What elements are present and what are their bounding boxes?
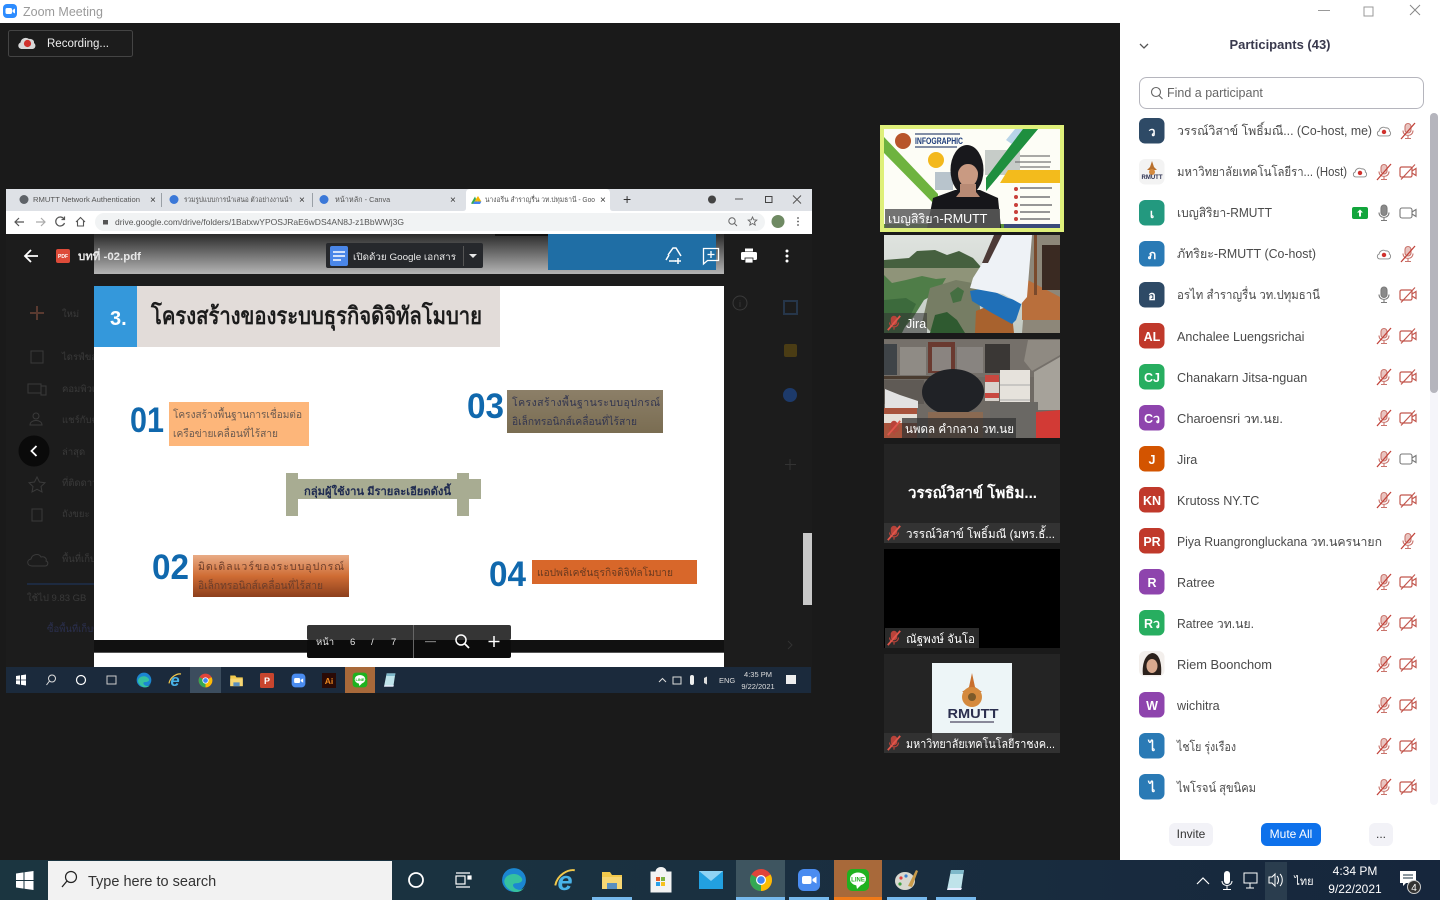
cortana (409, 873, 423, 887)
item 01: โครงสร้างพื้นฐานการเชื่อมต่อ (173, 407, 302, 421)
participant row: Rว (1144, 617, 1160, 631)
participant row: R (1147, 576, 1157, 590)
participant row: J (1149, 453, 1156, 467)
participant row: Jira (1177, 453, 1197, 467)
dimmed drive sidebar: คอมพิวเตอร์ (62, 383, 112, 395)
participant row: วรรณ์วิสาข์ โพธิ์มณี... (Co-host, me) (1177, 121, 1372, 138)
browser tab strip: + (623, 191, 631, 207)
item 02: 02 (152, 548, 189, 587)
mute all button (1261, 823, 1321, 846)
participant row: อรไท สำราญรื่น วท.ปทุมธานี (1177, 286, 1320, 303)
pdf viewer toolbar: บทที่ -02.pdf (78, 248, 141, 263)
task view (456, 873, 471, 887)
participant row: Anchalee Luengsrichai (1177, 330, 1304, 344)
dimmed drive sidebar: พื้นที่เก็บข้อมูล (62, 552, 121, 565)
participant row: Krutoss NY.TC (1177, 494, 1259, 508)
participant row: W (1146, 699, 1158, 713)
list scrollbar (1430, 113, 1438, 805)
recording indicator: Recording... (47, 38, 109, 50)
centre banner (286, 473, 481, 516)
window title bar: Zoom Meeting (23, 5, 103, 19)
item 03: โครงสร้างพื้นฐานระบบอุปกรณ์ (512, 395, 660, 409)
participant row: KN (1143, 494, 1161, 508)
video thumbnail: RMUTT logo: มหาวิทยาลัยเทคโนโลยีราชงค... (906, 737, 1055, 751)
dimmed drive sidebar: แชร์กับฉัน (62, 414, 105, 426)
browser tab strip: นางอรีน สำราญรื่น วท.ปทุมธานี - Goo (485, 194, 595, 204)
participant row: อ (1148, 289, 1156, 303)
item 03: อิเล็กทรอนิกส์เคลื่อนที่ไร้สาย (512, 414, 637, 428)
system tray: 4 (1411, 883, 1417, 894)
item 03 (467, 387, 663, 433)
pdf viewer toolbar: เปิดด้วย Google เอกสาร (353, 252, 456, 263)
browser tab strip: × (450, 195, 456, 206)
item 02: มิดเดิลแวร์ของระบบอุปกรณ์ (198, 560, 344, 573)
participant row: Piya Ruangrongluckana วท.นครนายก (1177, 535, 1382, 549)
participant row (1139, 282, 1416, 308)
dimmed drive sidebar: ใช้ไป 9.83 GB (27, 592, 86, 604)
room name label (888, 418, 1016, 438)
browser tab strip: รวมรูปแบบการนำเสนอ ตัวอย่างงานนำ (184, 195, 292, 204)
participant row (1139, 159, 1416, 184)
item 01 (130, 401, 309, 446)
item 02 (152, 548, 349, 597)
participant row (1139, 200, 1416, 226)
participant row (1139, 323, 1416, 348)
participant row: Ratree วท.นย. (1177, 617, 1254, 631)
dimmed right rail icons: i (739, 299, 741, 309)
participant row: ไพโรจน์ สุขนิคม (1176, 780, 1256, 796)
slide heading: 3. (110, 308, 127, 330)
pdf viewer toolbar: PDF (58, 254, 68, 260)
participant row (1139, 733, 1416, 758)
participant row: Ratree (1177, 576, 1215, 590)
dimmed drive sidebar: ซื้อพื้นที่เก็บข้อมูล (47, 622, 118, 635)
item 03: 03 (467, 387, 504, 426)
dimmed drive sidebar: ล่าสุด (62, 447, 85, 458)
presenter name label (885, 209, 1000, 228)
window controls (1318, 5, 1420, 16)
video thumbnail: presenter (880, 125, 1064, 232)
presenter name label: เบญสิริยา-RMUTT (888, 212, 988, 226)
shared screen taskbar: 4:35 PM (744, 670, 772, 679)
participant row: wichitra (1176, 699, 1220, 713)
window title bar (0, 0, 1120, 23)
video thumbnail: room with portraits (884, 339, 1060, 438)
browser address bar: drive.google.com/drive/folders/1BatxwYPOSJRaE6wDS4AN8J-z1BbWWj3G (115, 217, 404, 227)
participant row (1139, 692, 1416, 718)
recording indicator (8, 30, 132, 56)
centre banner: กลุ่มผู้ใช้งาน มีรายละเอียดดังนี้ (304, 483, 452, 499)
item 01: เครือข่ายเคลื่อนที่ไร้สาย (173, 426, 278, 440)
participant row (1139, 405, 1416, 430)
dimmed right rail icons (733, 296, 797, 649)
taskbar search box (48, 861, 392, 900)
browser tab strip (6, 189, 812, 211)
panel header: Participants (43) (1230, 38, 1330, 52)
participant row: Charoensri วท.นย. (1177, 412, 1283, 426)
system tray: 9/22/2021 (1328, 882, 1382, 896)
dimmed drive sidebar: ที่ติดดาว (62, 476, 97, 489)
scrollbar (803, 533, 812, 605)
video thumbnail: name only (884, 444, 1060, 543)
video thumbnail: black (884, 549, 1060, 648)
participant row: Chanakarn Jitsa-nguan (1177, 371, 1307, 385)
start button (16, 871, 34, 890)
taskbar search box: Type here to search (88, 874, 216, 890)
pdf page control: 6 (350, 637, 355, 648)
system tray: 4:34 PM (1333, 864, 1377, 878)
browser tab strip: หน้าหลัก - Canva (335, 195, 391, 204)
mute all button: Mute All (1270, 827, 1312, 841)
shared screen taskbar: 9/22/2021 (741, 682, 775, 691)
browser tab strip: RMUTT Network Authentication (33, 195, 140, 204)
slide heading (94, 286, 500, 347)
browser tab strip: × (150, 195, 156, 206)
Jira name label (884, 313, 927, 333)
pinned apps (502, 860, 976, 900)
participant row: มหาวิทยาลัยเทคโนโลยีรา... (Host) (1177, 164, 1347, 179)
shared screen taskbar: ENG (719, 676, 735, 685)
item 04: แอปพลิเคชันธุรกิจดิจิทัลโมบาย (537, 566, 673, 579)
item 04 (489, 555, 697, 594)
video thumbnail: name only: วรรณ์วิสาข์ โพธิ์มณี (มทร.ธั้... (906, 525, 1055, 541)
dimmed drive sidebar: ไดรฟ์ของฉัน (61, 351, 115, 363)
item 02: อิเล็กทรอนิกส์เคลื่อนที่ไร้สาย (198, 578, 323, 592)
shared screen taskbar (6, 667, 811, 693)
dimmed drive sidebar: ใหม่ (62, 308, 79, 320)
next page edge (94, 640, 724, 667)
participant row: CJ (1144, 371, 1160, 385)
shared screen: browser window (6, 189, 812, 693)
shared screen taskbar: Ai (325, 676, 333, 686)
participant row: ไ (1147, 739, 1155, 754)
browser address bar (6, 211, 812, 234)
video thumbnail: presenter: INFOGRAPHIC (915, 136, 963, 146)
more button (1369, 823, 1393, 846)
invite button (1169, 823, 1213, 846)
participant row: ภัทริยะ-RMUTT (Co-host) (1177, 247, 1316, 261)
dimmed drive sidebar: ถังขยะ (62, 509, 90, 520)
room name label: นพดล คำกลาง วท.นย (905, 422, 1014, 436)
windows taskbar (0, 860, 1440, 900)
system tray (1197, 862, 1420, 900)
participant row: Cว (1144, 412, 1160, 426)
participant row: เบญสิริยา-RMUTT (1177, 206, 1272, 220)
pdf page control (307, 625, 511, 658)
participant row (1139, 610, 1416, 636)
more button: ... (1376, 827, 1386, 841)
video thumbnail: name only: วรรณ์วิสาข์ โพธิม... (908, 483, 1037, 502)
pdf page control: หน้า (316, 637, 334, 648)
participant row: เ (1150, 207, 1154, 221)
participant row: ภ (1148, 248, 1156, 262)
sidebar collapse button (18, 436, 50, 466)
video thumbnail: RMUTT logo (884, 654, 1060, 753)
participant row (1139, 241, 1415, 266)
participant row: ไชโย รุ่งเรือง (1176, 739, 1236, 755)
item 01: 01 (130, 401, 164, 440)
participant row: ไ (1147, 780, 1155, 795)
participant row (1139, 569, 1416, 594)
slide page (94, 286, 724, 640)
video thumbnail: RMUTT logo: RMUTT (948, 706, 999, 721)
pdf page control: / (371, 637, 374, 648)
item 04: 04 (489, 555, 527, 594)
participant row (1139, 528, 1415, 554)
video thumbnail: Jira (884, 235, 1060, 333)
participant row (1139, 364, 1416, 390)
panel header (1140, 38, 1330, 52)
participant row (1139, 118, 1415, 144)
participant row: Riem Boonchom (1177, 658, 1272, 672)
participants panel (1120, 0, 1440, 860)
dimmed drive sidebar (27, 306, 121, 635)
participant row: PR (1143, 535, 1161, 549)
participant row (1139, 446, 1416, 472)
pdf viewer toolbar (25, 234, 788, 274)
slide heading: โครงสร้างของระบบธุรกิจดิจิทัลโมบาย (150, 301, 482, 332)
participant row (1139, 651, 1416, 676)
participant row: AL (1144, 330, 1161, 344)
invite button: Invite (1177, 827, 1206, 841)
browser tab strip: × (299, 195, 305, 206)
participant row: RMUTT (1142, 175, 1163, 181)
Jira name label: Jira (906, 317, 926, 331)
participant search (1140, 78, 1424, 108)
system tray: ไทย (1293, 875, 1314, 888)
shared screen taskbar: P (264, 676, 270, 686)
participant search: Find a participant (1167, 86, 1263, 100)
participant row (1139, 487, 1416, 512)
participant row (1139, 774, 1416, 800)
video thumbnail: black: ณัฐพงษ์ จันโอ (906, 632, 975, 646)
pdf page control: 7 (391, 637, 396, 648)
browser tab strip: × (600, 195, 606, 206)
participant row: ว (1148, 125, 1156, 139)
